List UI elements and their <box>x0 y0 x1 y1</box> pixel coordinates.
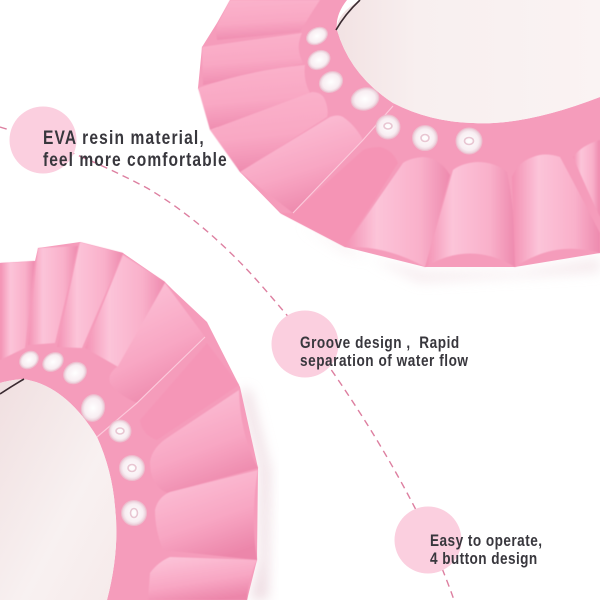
product photo: top right shower cap <box>198 0 600 282</box>
cap base band <box>198 0 600 267</box>
dashed curve <box>0 127 454 600</box>
inner hole <box>0 379 116 600</box>
cap shadow <box>240 390 270 600</box>
inner hole <box>337 0 600 123</box>
callout circle: buttons <box>394 506 462 574</box>
flaps <box>0 242 258 600</box>
text: easy to operate: 4 button design <box>430 550 537 568</box>
callout circle: EVA <box>10 106 76 174</box>
snap centres <box>116 428 138 518</box>
dark strap <box>336 0 360 30</box>
overlap ridge <box>97 337 205 437</box>
callout circle: groove <box>272 310 338 378</box>
flaps <box>198 0 600 267</box>
text: groove design <box>300 334 468 370</box>
text: easy to operate: Easy to operate, <box>430 532 542 550</box>
text: groove design: separation of water flow <box>300 352 468 370</box>
text: easy to operate <box>430 532 542 568</box>
product photo: bottom left shower cap <box>0 242 270 600</box>
cap shadow <box>300 225 600 282</box>
cap base band <box>0 242 258 600</box>
dark strap <box>0 379 24 394</box>
overlap ridge <box>293 106 393 213</box>
snap buttons <box>16 348 147 526</box>
text: EVA resin material: EVA resin material, <box>43 127 204 148</box>
snap centres <box>384 123 474 144</box>
text: EVA resin material <box>43 127 227 170</box>
text: groove design: Groove design , Rapid <box>300 334 459 352</box>
snap buttons <box>304 24 482 154</box>
text: EVA resin material: feel more comfortable <box>43 149 227 170</box>
